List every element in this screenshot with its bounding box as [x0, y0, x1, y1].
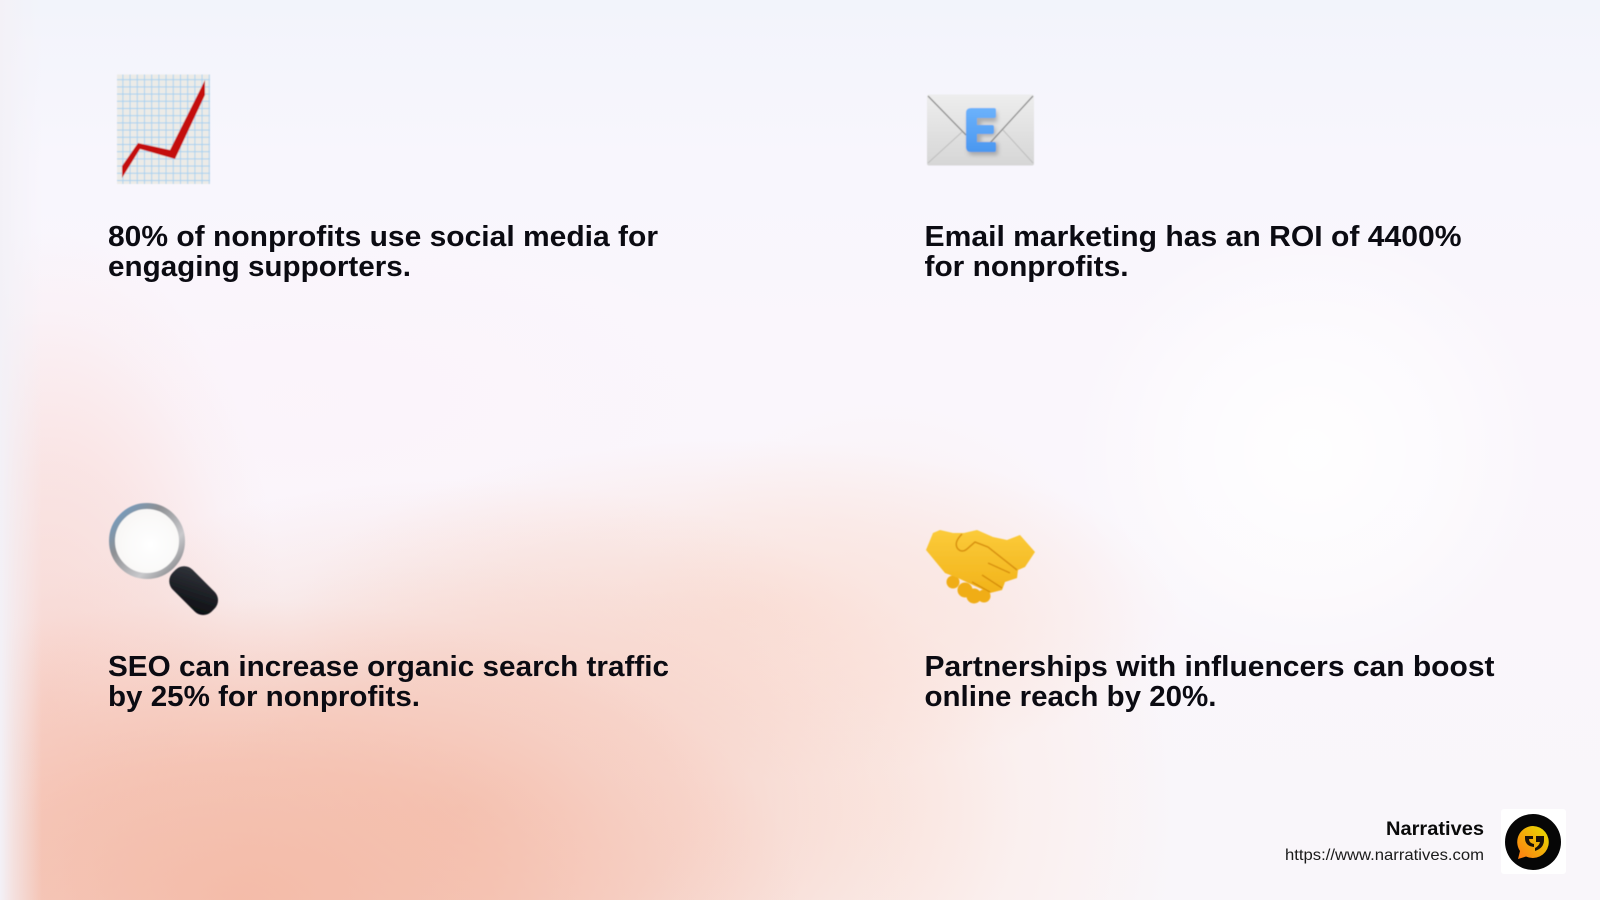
text: SEO statistic: by 25% for nonprofits. [108, 681, 420, 713]
icon: e-mail envelope [927, 94, 1034, 166]
item: social media statistic [108, 74, 658, 283]
logo [1501, 809, 1566, 874]
text: SEO statistic: SEO can increase organic search traffic [108, 651, 669, 683]
item: influencer partnerships statistic [924, 530, 1495, 713]
footer: brand [1285, 809, 1566, 874]
text: influencer partnerships statistic: Partnerships with influencers can boost [924, 651, 1495, 683]
text: social media statistic: engaging supporters. [108, 251, 411, 283]
icon: chart with upward trend [117, 74, 210, 184]
brand name: Narratives [1386, 819, 1484, 840]
item: SEO statistic [108, 506, 669, 713]
text: influencer partnerships statistic: online reach by 20%. [924, 681, 1216, 713]
icon: magnifying glass [112, 506, 223, 620]
text: email marketing statistic: Email marketing has an ROI of 4400% [924, 221, 1462, 253]
text: social media statistic: 80% of nonprofits use social media for [108, 221, 658, 253]
text: email marketing statistic: for nonprofits. [924, 251, 1128, 283]
item: email marketing statistic [924, 94, 1462, 283]
brand url: https://www.narratives.com [1285, 847, 1484, 864]
icon: handshake [926, 530, 1035, 604]
